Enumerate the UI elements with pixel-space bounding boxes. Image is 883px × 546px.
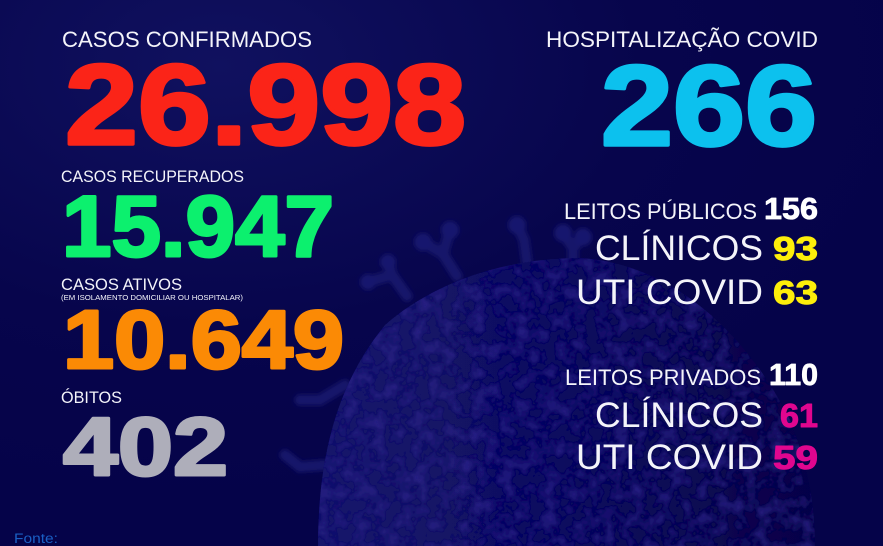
stat: casos confirmados — [62, 27, 466, 169]
stat: obitos — [61, 388, 228, 493]
label: hospitalizacao: HOSPITALIZAÇÃO COVID — [546, 27, 818, 52]
row: leitos privados total — [565, 357, 818, 392]
panel: leitos privados — [565, 357, 818, 477]
stat: casos ativos — [61, 275, 344, 386]
row: leitos publicos total — [564, 191, 818, 226]
number: 26.998: 26.998 — [65, 42, 466, 169]
row: clinicos privados: CLÍNICOS — [595, 396, 763, 435]
row: leitos privados total: LEITOS PRIVADOS — [565, 365, 761, 390]
label: casos recuperados: CASOS RECUPERADOS — [61, 167, 244, 186]
row: leitos publicos total: 156 — [764, 191, 818, 226]
stat: casos recuperados — [61, 167, 334, 275]
number: 10.649: 10.649 — [63, 293, 344, 386]
row: leitos publicos total: LEITOS PÚBLICOS — [564, 199, 757, 224]
row: uti privados: UTI COVID — [576, 438, 763, 477]
panel: leitos publicos — [564, 191, 818, 312]
sublabel: isolamento: (EM ISOLAMENTO DOMICILIAR OU HOSPITALAR) — [61, 293, 243, 302]
number: 15.947: 15.947 — [62, 179, 334, 275]
label: casos ativos: CASOS ATIVOS — [61, 275, 182, 294]
label: obitos: ÓBITOS — [61, 388, 122, 407]
row: leitos privados total: 110 — [769, 357, 818, 392]
source label: Fonte: — [14, 531, 58, 546]
number: 402: 402 — [63, 400, 228, 493]
virus illustration — [285, 216, 815, 546]
row: uti publicos: 63 — [773, 274, 818, 311]
label: casos confirmados: CASOS CONFIRMADOS — [62, 27, 312, 52]
row: clinicos privados: 61 — [780, 397, 818, 434]
row: uti privados: 59 — [773, 439, 818, 476]
row: clinicos publicos: CLÍNICOS — [595, 229, 763, 268]
stat: hospitalizacao covid — [546, 27, 818, 170]
number: 266: 266 — [601, 43, 817, 170]
row: uti publicos: UTI COVID — [576, 273, 763, 312]
row: clinicos publicos: 93 — [773, 230, 818, 267]
